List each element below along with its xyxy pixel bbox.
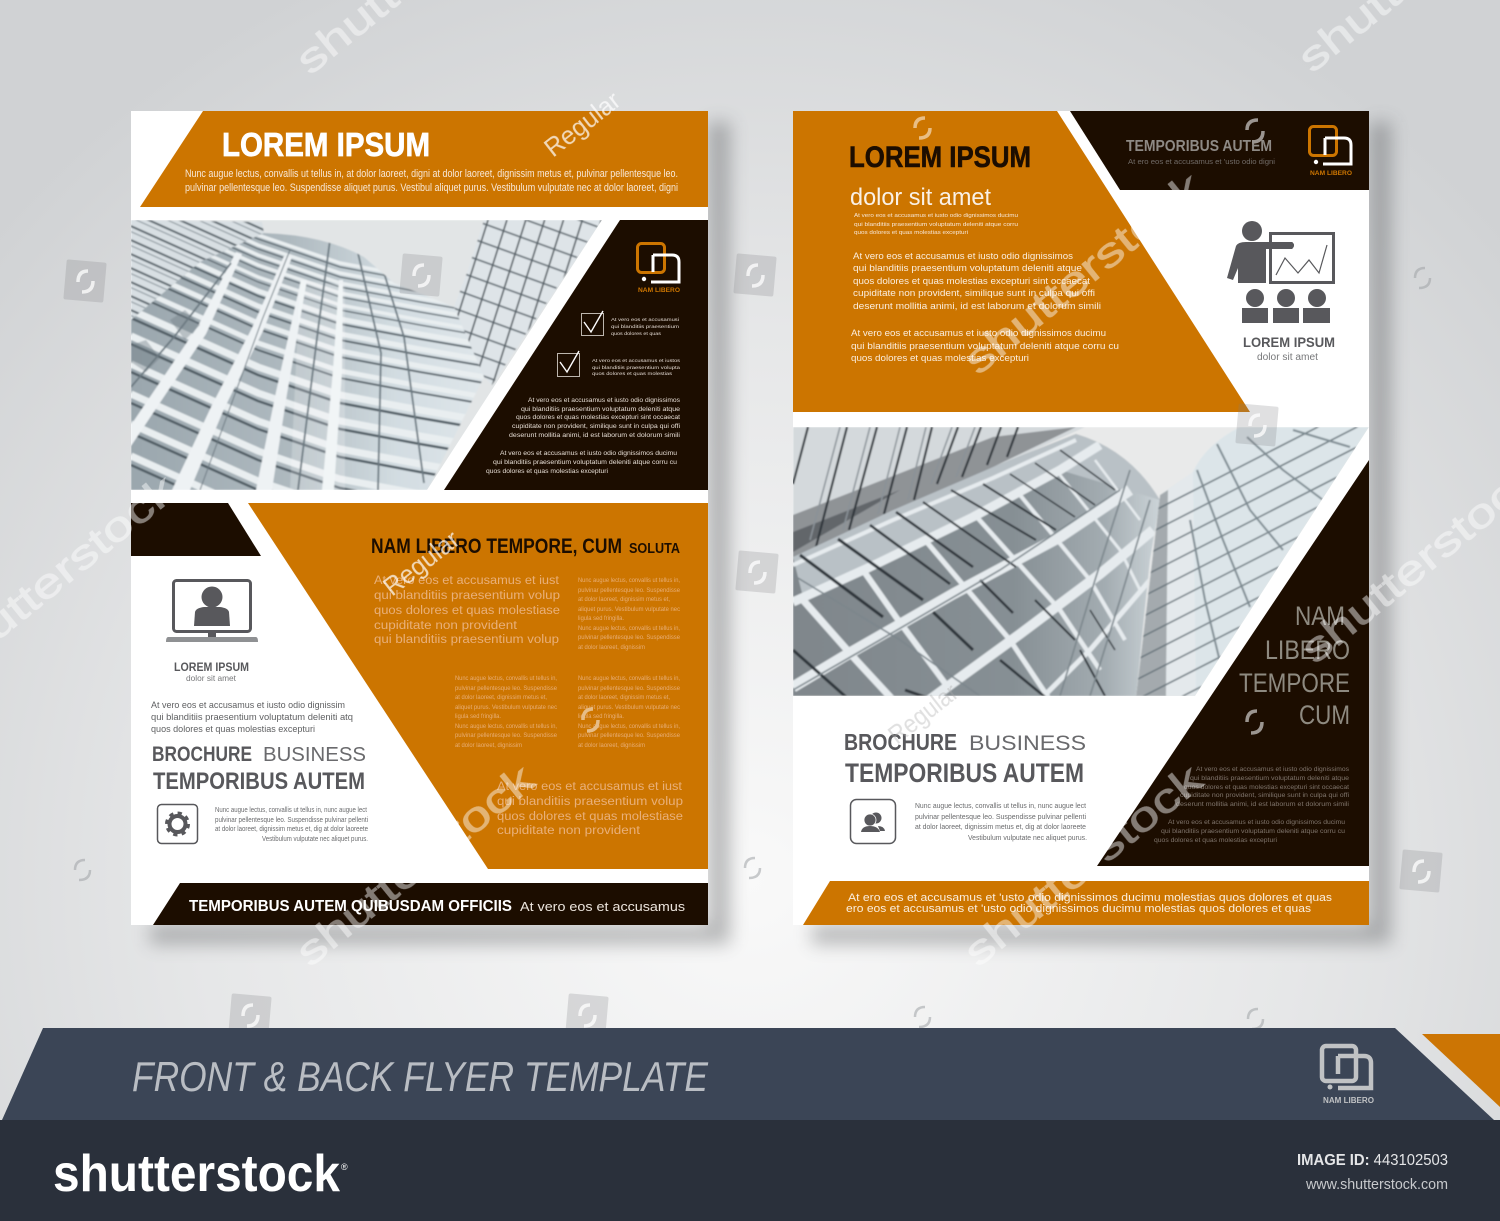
people description: at dolor laoreet, dignissim metus et, dig at dolor laoreete [915,824,1086,831]
icon caption: LOREM IPSUM [174,662,249,674]
column text: lower middle: pulvinar pellentesque leo. Suspendisse [455,685,557,692]
panel: back flyer [793,111,1400,925]
watermark: small square marks [63,118,1443,1037]
intro paragraph: At vero eos et accusamus et iusto odio dignissim [151,700,345,711]
column text: lower right [578,675,681,749]
header banner [140,111,708,207]
gear description: Vestibulum vulputate nec aliquet purus. [262,836,368,843]
paragraph: bottom [497,781,683,837]
column text: lower middle: at dolor laoreet, dignissim [455,742,522,749]
dark panel body text [486,397,681,475]
ascending white mullions [793,440,1153,727]
brochure heading [844,729,1086,788]
hero paragraph 1: deserunt mollitia animi, id est laborum et dolorum simili [853,301,1101,312]
column text: upper right [578,577,681,651]
dark panel body text: quos dolores et quas molestias excepturi sint occaecat [516,414,680,421]
people description: Nunc augue lectus, convallis ut tellus in, nunc augue lect [915,803,1086,810]
logo caption: NAM LIBERO [1310,170,1352,177]
bottom footer bar [0,1120,1500,1221]
hero paragraph 1: qui blanditiis praesentium voluptatum deleniti atque [853,263,1082,274]
footer bar [803,881,1369,925]
icon: people [850,800,896,844]
brochure heading: TEMPORIBUS AUTEM [845,758,1084,788]
dark panel body text: cupiditate non provident, similique sunt in culpa qui offi [512,423,680,430]
people description: pulvinar pellentesque leo. Suspendisse pulvinar pellenti [915,814,1086,821]
brochure heading: BROCHURE [844,729,957,755]
brochure heading: BUSINESS [263,744,366,766]
hero paragraph 1 [853,251,1101,312]
column text: upper right: aliquet purus. Vestibulum vulputate nec [578,606,681,613]
icon: person on monitor [166,580,258,642]
side panel heading: TEMPORE [1239,668,1350,698]
paragraph: upper left: qui blanditiis praesentium volup [374,590,560,602]
watermark: regular labels [377,85,964,750]
icon caption [1243,334,1335,363]
column text: lower middle: at dolor laoreet, dignissim metus et, [455,694,547,701]
hero small text [854,213,1018,236]
side panel heading: NAM [1295,601,1345,631]
header body text: Nunc augue lectus, convallis ut tellus in, at dolor laoreet, digni at dolor laoreet, dignissim metus et, pulvinar pellentesque leo. [185,168,678,180]
dark panel body text: At vero eos et accusamus et iusto odio dignissimos [528,397,681,404]
column text: lower middle [455,675,558,749]
people description [915,803,1087,842]
registered mark: ® [341,1162,348,1172]
side panel body text: At vero eos et accusamus et iusto odio dignissimos [1196,766,1350,773]
column text: lower right: pulvinar pellentesque leo. Suspendisse [578,685,680,692]
dark info panel [444,220,708,490]
orange hero panel [793,111,1250,412]
watermark: regular labels: Regular [377,524,465,602]
watermark: stock text overlay [0,0,1500,975]
column text: upper right: at dolor laoreet, dignissim [578,644,645,651]
column text: lower middle: Nunc augue lectus, convallis ut tellus in, [455,675,557,682]
paragraph: upper left: quos dolores et quas molestiase [374,605,560,617]
hero small text: qui blanditiis praesentium voluptatum deleniti atque corru [854,222,1018,228]
gear description: Nunc augue lectus, convallis ut tellus in, nunc augue lect [215,807,367,814]
building photo [793,427,1369,696]
dark side panel [1097,460,1369,866]
column text: upper right: Nunc augue lectus, convallis ut tellus in, [578,625,680,632]
side panel body text: qui blanditiis praesentium voluptatum deleniti atque corru cu [1161,828,1345,835]
header title: LOREM IPSUM [222,126,430,163]
dark panel body text: qui blanditiis praesentium voluptatum deleniti atque corru cu [493,459,677,466]
watermark: regular labels: Regular [882,677,964,750]
side panel body text: cupiditate non provident, similique sunt in culpa qui offi [1180,792,1349,799]
side panel heading [1239,601,1350,730]
paragraph: bottom: cupiditate non provident [497,825,641,837]
tower with thin grid [1136,427,1368,696]
brochure heading: TEMPORIBUS AUTEM [153,768,365,795]
side panel body text [1154,766,1350,844]
side panel heading: CUM [1299,700,1350,730]
column text: lower right: at dolor laoreet, dignissim [578,742,645,749]
watermark: stock text overlay: shutterstock [955,163,1211,383]
checklist item 2: At vero eos et accusamus et iustos [592,358,681,363]
dark corner block [131,503,261,556]
dark panel body text: At vero eos et accusamus et iusto odio dignissimos ducimu [500,450,677,457]
paragraph: bottom: qui blanditiis praesentium volup [497,796,683,808]
descending dark lines [793,450,1115,697]
checklist item 2: quos dolores et quas molestias [592,371,673,376]
header body text [185,168,678,194]
footer bar: ero eos et accusamus et 'usto odio dignissimos ducimu molestias quos dolores et quas [846,903,1312,915]
hero paragraph 1: At vero eos et accusamus et iusto odio dignissimos [853,251,1073,262]
paragraph: upper left: qui blanditiis praesentium volup [374,634,559,646]
icon: gear [158,804,198,844]
upper stripes block [793,427,1083,515]
hero paragraph 1: quos dolores et quas molestias excepturi sint occaecat [853,276,1090,287]
paragraph: bottom: quos dolores et quas molestiase [497,811,683,823]
icon: logo [638,244,679,282]
side panel body text: deserunt mollitia animi, id est laborum et dolorum simili [1176,801,1349,808]
brochure heading: BROCHURE [152,743,252,766]
white row bands [131,234,484,490]
icon caption [174,662,249,683]
header body text: pulvinar pellentesque leo. Suspendisse aliquet purus. Vestibul aliquet purus. Vestibulum vulputate nec at dolor laoreet, digni [185,182,678,194]
column text: lower right: Nunc augue lectus, convallis ut tellus in, [578,723,680,730]
column text: upper right: pulvinar pellentesque leo. Suspendisse [578,634,680,641]
column text: upper right: at dolor laoreet, dignissim metus et, [578,596,670,603]
column text: lower right: ligula sed fringilla. [578,713,624,720]
gear description: pulvinar pellentesque leo. Suspendisse pulvinar pellenti [215,817,368,824]
bottom banner [2,1028,1500,1120]
image id: IMAGE ID: 443102503 [1297,1152,1448,1169]
thin grey crossing lines [793,470,1150,696]
watermark: stock text overlay: shutterstock [1292,452,1500,672]
hero small text: At vero eos et accusamus et iusto odio dignissimos ducimu [854,213,1018,219]
paragraph: bottom: At vero eos et accusamus et iust [497,781,683,793]
dark panel body text: quos dolores et quas molestias excepturi [486,468,608,475]
checklist item 2 [558,351,681,376]
side panel heading: LIBERO [1265,635,1350,665]
footer bar [153,883,708,925]
side panel body text: At vero eos et accusamus et iusto odio dignissimos ducimu [1168,819,1345,826]
icon: presenter with chart and audience [1227,221,1334,323]
dark header block: TEMPORIBUS AUTEM [1126,138,1272,155]
panel: front flyer [131,111,708,925]
checklist item 1: At vero eos et accusamusi [611,317,679,322]
gear description [215,807,368,843]
column text: lower right: Nunc augue lectus, convallis ut tellus in, [578,675,680,682]
side panel body text: qui blanditiis praesentium voluptatum deleniti atque [1190,775,1349,782]
icon caption: LOREM IPSUM [1243,334,1335,350]
side panel body text: quos dolores et quas molestias excepturi sint occaecat [1184,784,1349,791]
intro paragraph: qui blanditiis praesentium voluptatum deleniti atq [151,712,353,723]
panel heading: NAM LIBERO TEMPORE, CUM [371,535,622,558]
column text: lower right: pulvinar pellentesque leo. Suspendisse [578,732,680,739]
hero paragraph 2: At vero eos et accusamus et iusto odio dignissimos ducimu [851,328,1106,339]
footer bar: TEMPORIBUS AUTEM QUIBUSDAM OFFICIIS [189,898,512,915]
hero paragraph 2: quos dolores et quas molestias excepturi [851,353,1029,364]
column text: upper right: pulvinar pellentesque leo. Suspendisse [578,587,680,594]
brochure heading: BUSINESS [969,732,1086,755]
dark panel body text: deserunt mollitia animi, id est laborum et dolorum simili [509,432,680,439]
flyer drop shadows [150,122,1391,944]
checklist item 1: qui blanditiis praesentium [611,324,679,329]
white fan mullions [131,252,343,490]
banner logo caption: NAM LIBERO [1323,1096,1374,1105]
intro paragraph: quos dolores et quas molestias excepturi [151,724,315,735]
column text: lower middle: ligula sed fringilla. [455,713,501,720]
footer bar: At vero eos et accusamus [520,899,686,914]
hero paragraph 1: cupiditate non provident, similique sunt in culpa qui offi [853,288,1095,299]
site address: www.shutterstock.com [1305,1176,1448,1193]
paragraph: upper left: At vero eos et accusamus et iust [374,575,560,587]
hero subtitle: dolor sit amet [850,184,991,211]
cylinder building [793,434,1160,696]
watermark: stock text overlay: shutterstock [287,755,543,975]
hero title: LOREM IPSUM [849,141,1031,174]
dark row lines [131,236,482,490]
descending white mullions [803,460,1140,700]
paragraph: upper left: cupiditate non provident [374,620,518,632]
icon: logo [1310,126,1351,164]
thin fan lines [131,240,424,490]
icon caption: dolor sit amet [186,673,237,683]
people description: Vestibulum vulputate nec aliquet purus. [968,835,1087,842]
hero paragraph 2: qui blanditiis praesentium voluptatum deleniti atque corru cu [851,341,1119,352]
panel heading: SOLUTA [629,541,680,557]
icon caption: dolor sit amet [1257,352,1318,363]
hero paragraph 2 [851,328,1119,364]
checklist item 2: qui blanditiis praesentium volupta [592,365,681,370]
watermark: stock text overlay: shutterstock [955,755,1211,975]
dark header block: At ero eos et accusamus et 'usto odio digni [1128,159,1275,166]
column text: lower right: at dolor laoreet, dignissim metus et, [578,694,670,701]
logo caption: NAM LIBERO [638,287,680,294]
column text: upper right: Nunc augue lectus, convallis ut tellus in, [578,577,680,584]
orange content panel [248,503,708,869]
shutterstock wordmark: shutterstock [53,1145,340,1203]
intro paragraph [151,700,353,735]
watermark: regular labels: Regular [538,85,626,163]
dark header block [1070,111,1369,190]
column text: lower middle: Nunc augue lectus, convallis ut tellus in, [455,723,557,730]
paragraph: upper left [374,575,560,646]
brochure heading [152,743,366,795]
column text: lower right: aliquet purus. Vestibulum vulputate nec [578,704,681,711]
checklist item 1 [582,311,679,336]
footer bar: At ero eos et accusamus et 'usto odio dignissimos ducimu molestias quos dolores et quas [848,892,1333,904]
banner title: FRONT & BACK FLYER TEMPLATE [132,1053,709,1100]
side panel body text: quos dolores et quas molestias excepturi [1154,837,1277,844]
gear description: at dolor laoreet, dignissim metus et, dig at dolor laoreete [215,826,368,833]
checklist item 1: quos dolores et quas [611,331,662,336]
column text: lower middle: aliquet purus. Vestibulum vulputate nec [455,704,558,711]
column text: lower middle: pulvinar pellentesque leo. Suspendisse [455,732,557,739]
icon: banner logo [1322,1046,1371,1090]
dark panel body text: qui blanditiis praesentium voluptatum deleniti atque [521,406,680,413]
building photo [131,220,602,490]
column text: upper right: ligula sed fringilla. [578,615,624,622]
hero small text: quos dolores et quas molestias excepturi [854,230,968,236]
